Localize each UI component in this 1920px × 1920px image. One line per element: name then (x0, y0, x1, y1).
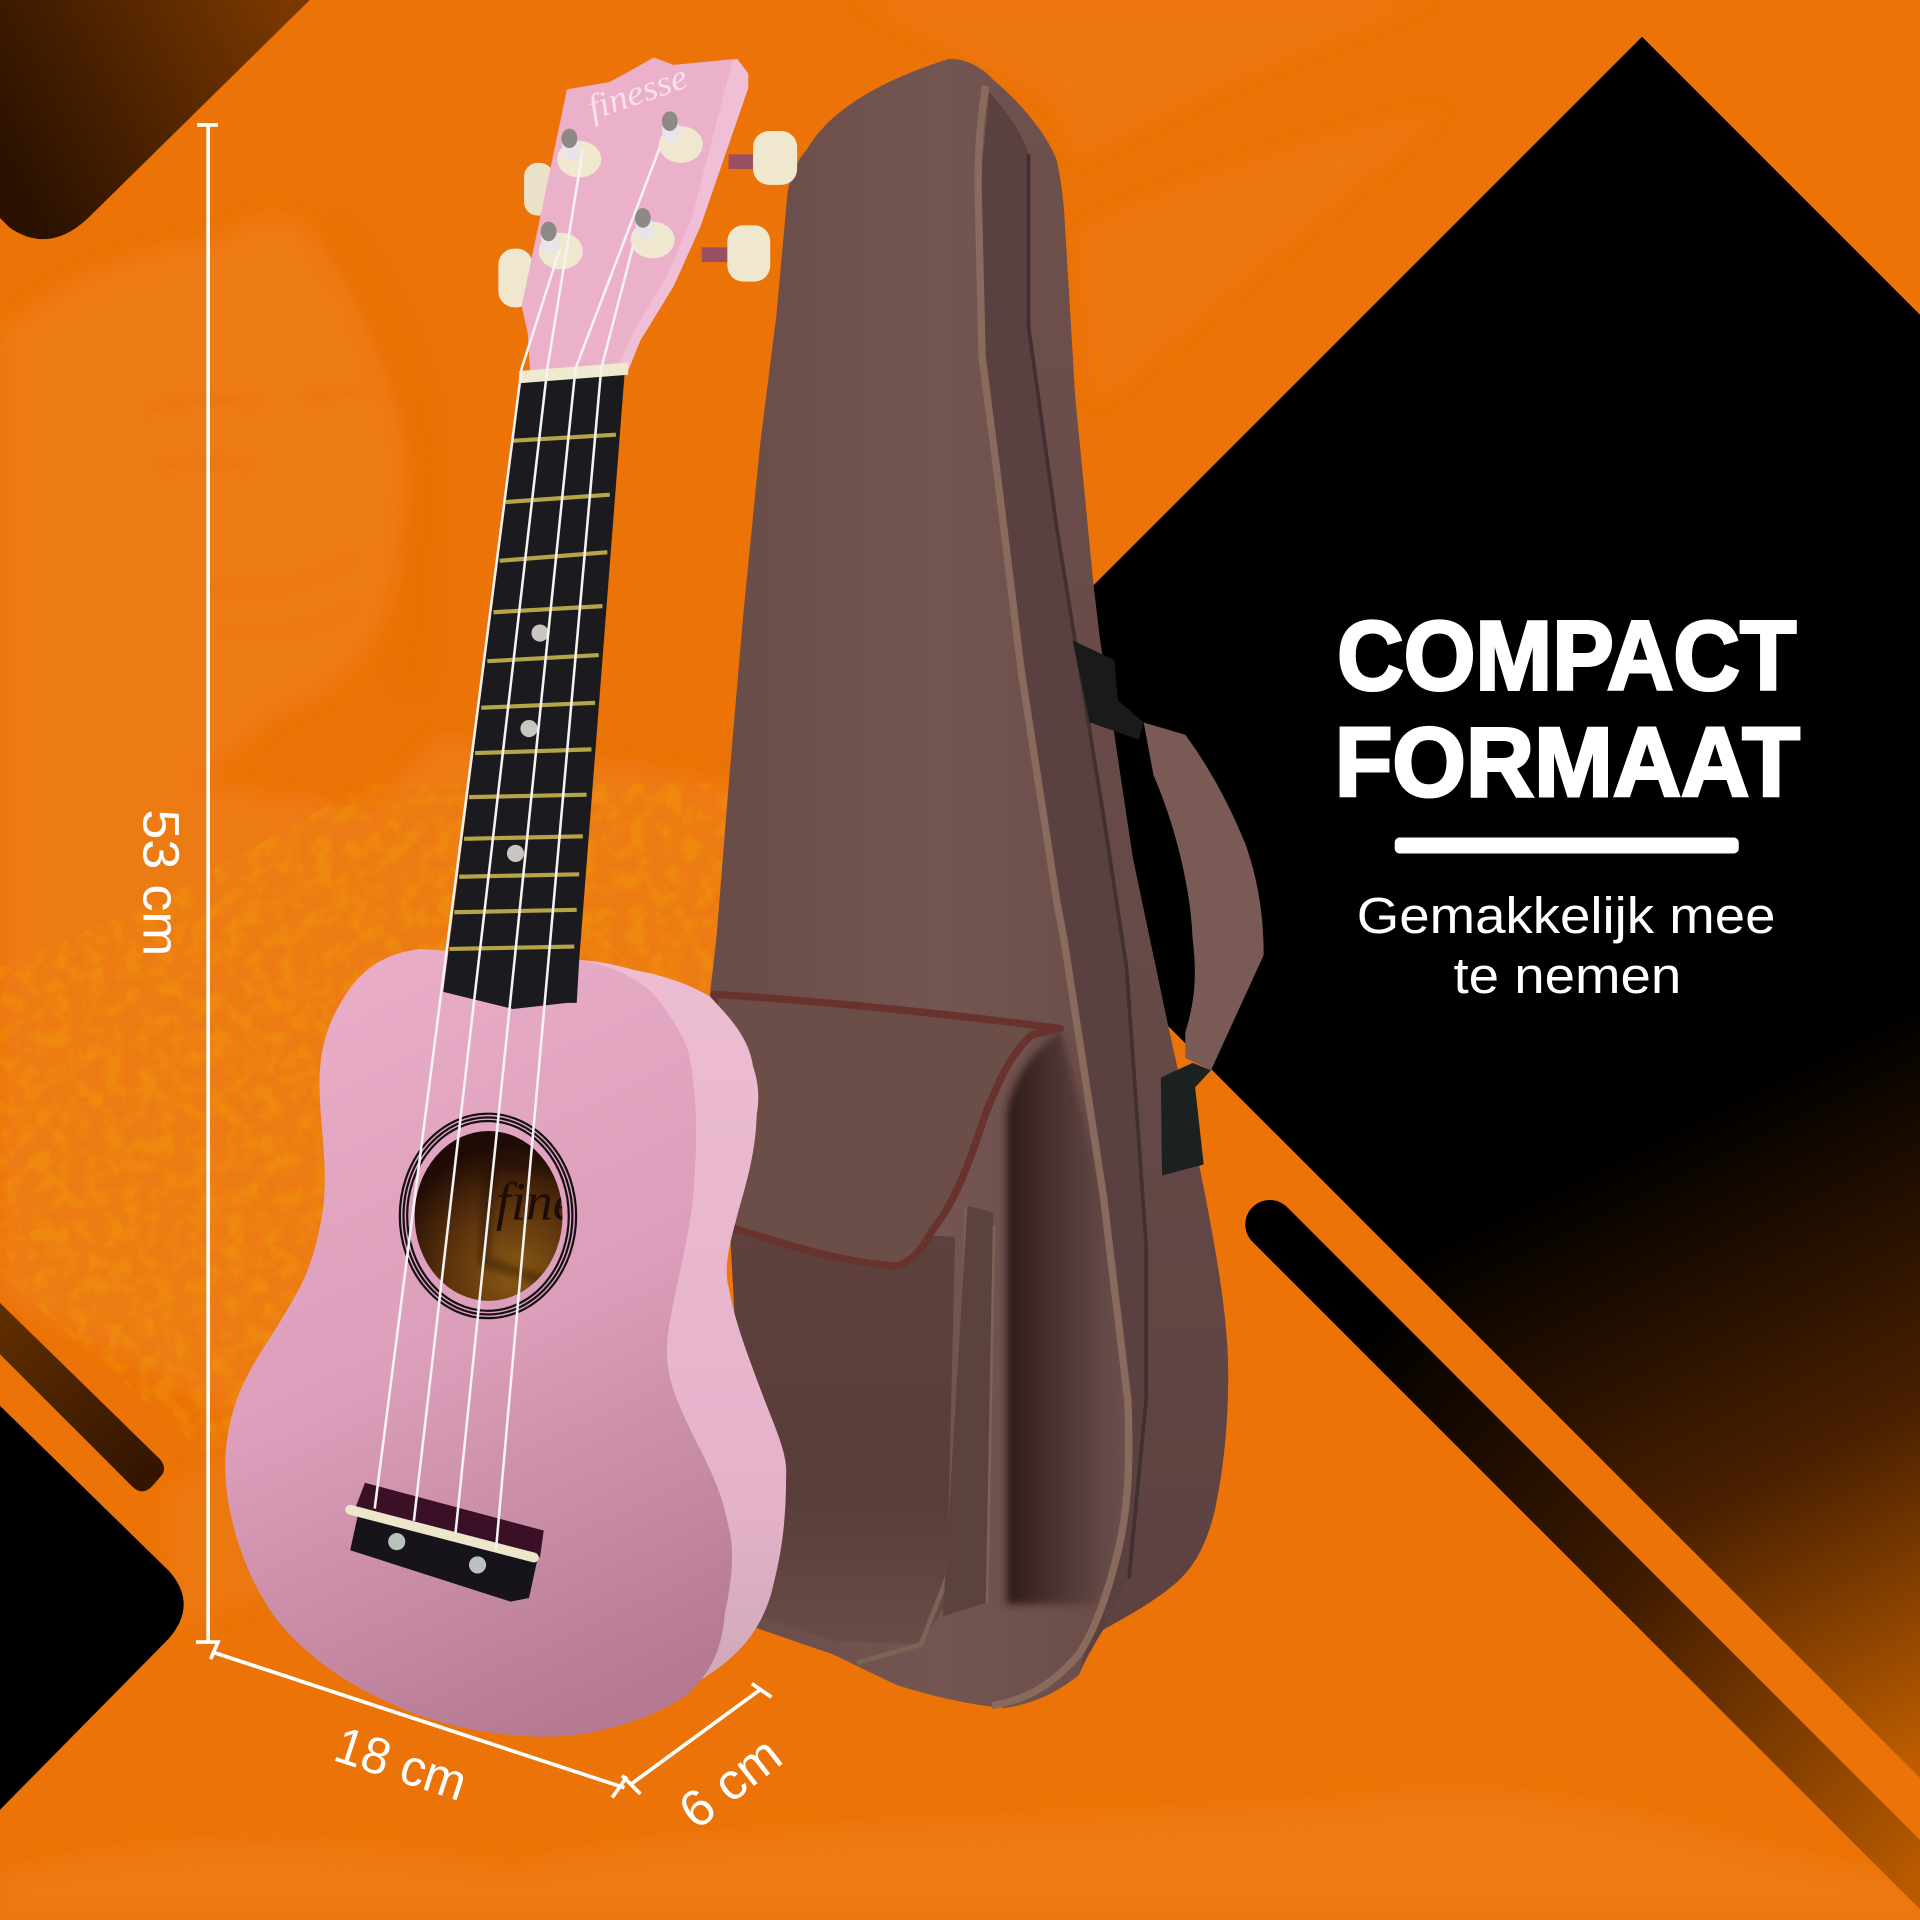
frets (449, 435, 616, 949)
tuning pegs (498, 131, 797, 307)
logo: finesse (582, 56, 693, 128)
body front (225, 949, 732, 1737)
top-left dark corner shape (0, 0, 310, 239)
heading: FORMAAT (1335, 707, 1800, 817)
width dimension line (212, 1652, 627, 1798)
label: 53 cm: 53 cm (132, 809, 190, 956)
headstock (522, 58, 748, 373)
subheading: Gemakkelijk mee (1357, 886, 1776, 944)
gig bag (710, 59, 1264, 1708)
bag right gusset (978, 88, 1228, 1675)
fret markers (507, 624, 549, 862)
bag zip band (978, 92, 1146, 1653)
sound hole: fine (496, 1172, 577, 1232)
pocket seam (857, 1206, 993, 1663)
right black diamond panel (910, 37, 1920, 1778)
label: 18 cm: 18 cm (328, 1715, 474, 1812)
pocket flap (714, 994, 1060, 1266)
depth dimension line (622, 1684, 771, 1794)
sound hole (400, 1114, 577, 1318)
heading: COMPACT (1337, 600, 1796, 710)
body side (490, 960, 786, 1733)
heading (1335, 600, 1800, 817)
fretboard (443, 375, 624, 1009)
bag handle (1144, 722, 1264, 1070)
lower pocket (730, 1227, 955, 1644)
bridge (350, 1483, 544, 1602)
subheading (1357, 886, 1776, 1004)
bag piping (978, 86, 1129, 1706)
bottom-left black shape (0, 1406, 184, 1810)
subheading: te nemen (1453, 946, 1681, 1004)
bottom-left diagonal stripe (0, 1303, 164, 1491)
height dimension line (196, 125, 218, 1659)
headstock bevel (615, 59, 748, 373)
heading divider (1395, 838, 1739, 853)
handle strap top (1073, 640, 1144, 740)
bag body (710, 59, 1228, 1708)
bag zip line (1029, 154, 1146, 1578)
tuner washers and posts (539, 111, 703, 269)
side pocket (943, 1206, 993, 1616)
strings (375, 147, 660, 1550)
nut (519, 362, 628, 383)
ukulele (225, 56, 797, 1737)
handle strap bottom (1161, 1063, 1211, 1176)
inner shadow recess (1007, 1031, 1128, 1604)
diagonal stripe right (1270, 1224, 1920, 1914)
label: 6 cm: 6 cm (667, 1725, 792, 1840)
